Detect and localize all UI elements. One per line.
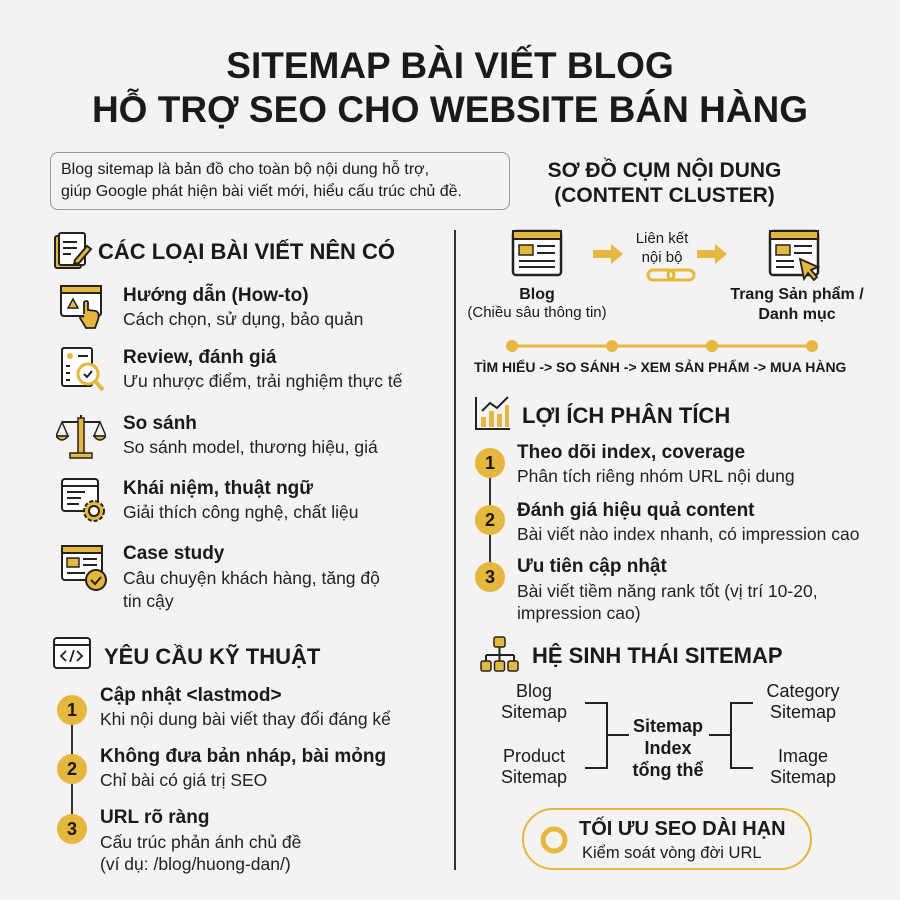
heading: SƠ ĐỒ CỤM NỘI DUNG [548, 159, 781, 182]
step 3: Cấu trúc phản ánh chủ đề [100, 832, 301, 852]
benefit 1: 1 [485, 453, 495, 473]
diagram: Image [778, 746, 828, 766]
callout: long-term SEO: TỐI ƯU SEO DÀI HẠN [579, 818, 786, 840]
benefit 2: Đánh giá hiệu quả content [517, 500, 755, 521]
diagram: Index [644, 738, 692, 758]
heading: YÊU CẦU KỸ THUẬT [104, 644, 320, 669]
item: how-to: Cách chọn, sử dụng, bảo quản [123, 309, 363, 329]
diagram: Blog [516, 681, 552, 701]
benefit 1: Phân tích riêng nhóm URL nội dung [517, 466, 795, 486]
step 3 [57, 807, 301, 874]
icon: code window [53, 637, 91, 669]
benefit 2 [475, 500, 859, 544]
heading: LỢI ÍCH PHÂN TÍCH [522, 403, 730, 428]
title: HỖ TRỢ SEO CHO WEBSITE BÁN HÀNG [92, 89, 808, 130]
panel: content cluster [467, 158, 864, 375]
benefit 3: Ưu tiên cập nhật [517, 556, 667, 577]
panel: technical requirements [53, 637, 391, 874]
heading: HỆ SINH THÁI SITEMAP [532, 643, 783, 668]
item: compare: So sánh [123, 413, 197, 434]
item: concepts [61, 478, 358, 522]
icon: chart [475, 396, 510, 430]
benefit 2: 2 [485, 510, 495, 530]
label: blog: (Chiều sâu thông tin) [467, 304, 607, 321]
benefit 1: Theo dõi index, coverage [517, 442, 745, 463]
diagram: tổng thể [632, 760, 703, 780]
link label [636, 230, 688, 266]
label: blog [467, 286, 607, 321]
title: SITEMAP BÀI VIẾT BLOG [226, 45, 674, 86]
step 2: Chỉ bài có giá trị SEO [100, 770, 267, 790]
diagram: Sitemap [501, 767, 567, 787]
diagram: Category [766, 681, 840, 701]
diagram: Sitemap [770, 702, 836, 722]
benefit 3: 3 [485, 567, 495, 587]
step 1 [57, 685, 391, 729]
diagram: Sitemap [633, 716, 703, 736]
benefit 3: impression cao) [517, 603, 641, 623]
item: case study [61, 543, 380, 611]
title [92, 44, 808, 130]
heading: (CONTENT CLUSTER) [554, 184, 775, 207]
item: concepts: Khái niệm, thuật ngữ [123, 478, 313, 499]
item: compare: So sánh model, thương hiệu, giá [123, 437, 378, 457]
intro box: Blog sitemap là bản đồ cho toàn bộ nội dung hỗ trợ, [61, 161, 429, 178]
label: product: Danh mục [758, 306, 836, 323]
icon: product page [768, 230, 820, 281]
item: case study: Case study [123, 543, 224, 564]
item: review: Ưu nhược điểm, trải nghiệm thực tế [123, 371, 402, 391]
link label: Liên kết [636, 230, 688, 247]
icon: hierarchy [480, 636, 519, 672]
panel: sitemap ecosystem [480, 636, 840, 787]
step 1: Khi nội dung bài viết thay đổi đáng kể [100, 709, 391, 729]
benefit 2: Bài viết nào index nhanh, có impression cao [517, 524, 859, 544]
callout: long-term SEO [522, 808, 812, 870]
item: case study: tin cậy [123, 591, 174, 611]
item: review [61, 347, 402, 392]
step 2: 2 [67, 759, 77, 779]
diagram: Product [503, 746, 565, 766]
panel: analysis benefits [475, 396, 859, 623]
panel: article types [54, 232, 402, 611]
diagram: Sitemap [770, 767, 836, 787]
step 3: URL rõ ràng [100, 807, 209, 828]
label: product: Trang Sản phẩm / [730, 286, 864, 303]
intro box: giúp Google phát hiện bài viết mới, hiểu cấu trúc chủ đề. [61, 183, 462, 200]
step 3: (ví dụ: /blog/huong-dan/) [100, 854, 291, 874]
link label: nội bộ [642, 249, 682, 266]
item: case study: Câu chuyện khách hàng, tăng độ [123, 568, 380, 588]
benefit 1 [475, 442, 795, 486]
item: concepts: Giải thích công nghệ, chất liệu [123, 502, 358, 522]
heading: CÁC LOẠI BÀI VIẾT NÊN CÓ [98, 239, 395, 264]
item: review: Review, đánh giá [123, 347, 276, 368]
benefit 3: Bài viết tiềm năng rank tốt (vị trí 10-20, [517, 581, 818, 601]
arrow [593, 244, 623, 264]
item: how-to [60, 284, 363, 329]
diagram: Sitemap [501, 702, 567, 722]
step 2: Không đưa bản nháp, bài mỏng [100, 746, 386, 767]
step 1: Cập nhật <lastmod> [100, 685, 282, 706]
callout: long-term SEO: Kiểm soát vòng đời URL [582, 844, 762, 862]
diagram [501, 681, 840, 787]
step 2 [57, 746, 386, 790]
icon: document pen [54, 232, 92, 269]
label: product [730, 286, 864, 323]
item: how-to: Hướng dẫn (How-to) [123, 285, 309, 306]
arrow [697, 244, 727, 264]
item: compare [56, 413, 378, 459]
label: blog: Blog [519, 286, 555, 303]
step 1: 1 [67, 700, 77, 720]
heading [548, 158, 781, 207]
benefit 3 [475, 556, 818, 623]
icon: blog page [512, 230, 562, 276]
intro box [50, 152, 510, 210]
panel: content cluster: TÌM HIỂU -> SO SÁNH -> XEM SẢN PHẨM -> MUA HÀNG [474, 359, 846, 375]
step 3: 3 [67, 819, 77, 839]
timeline [506, 340, 818, 352]
